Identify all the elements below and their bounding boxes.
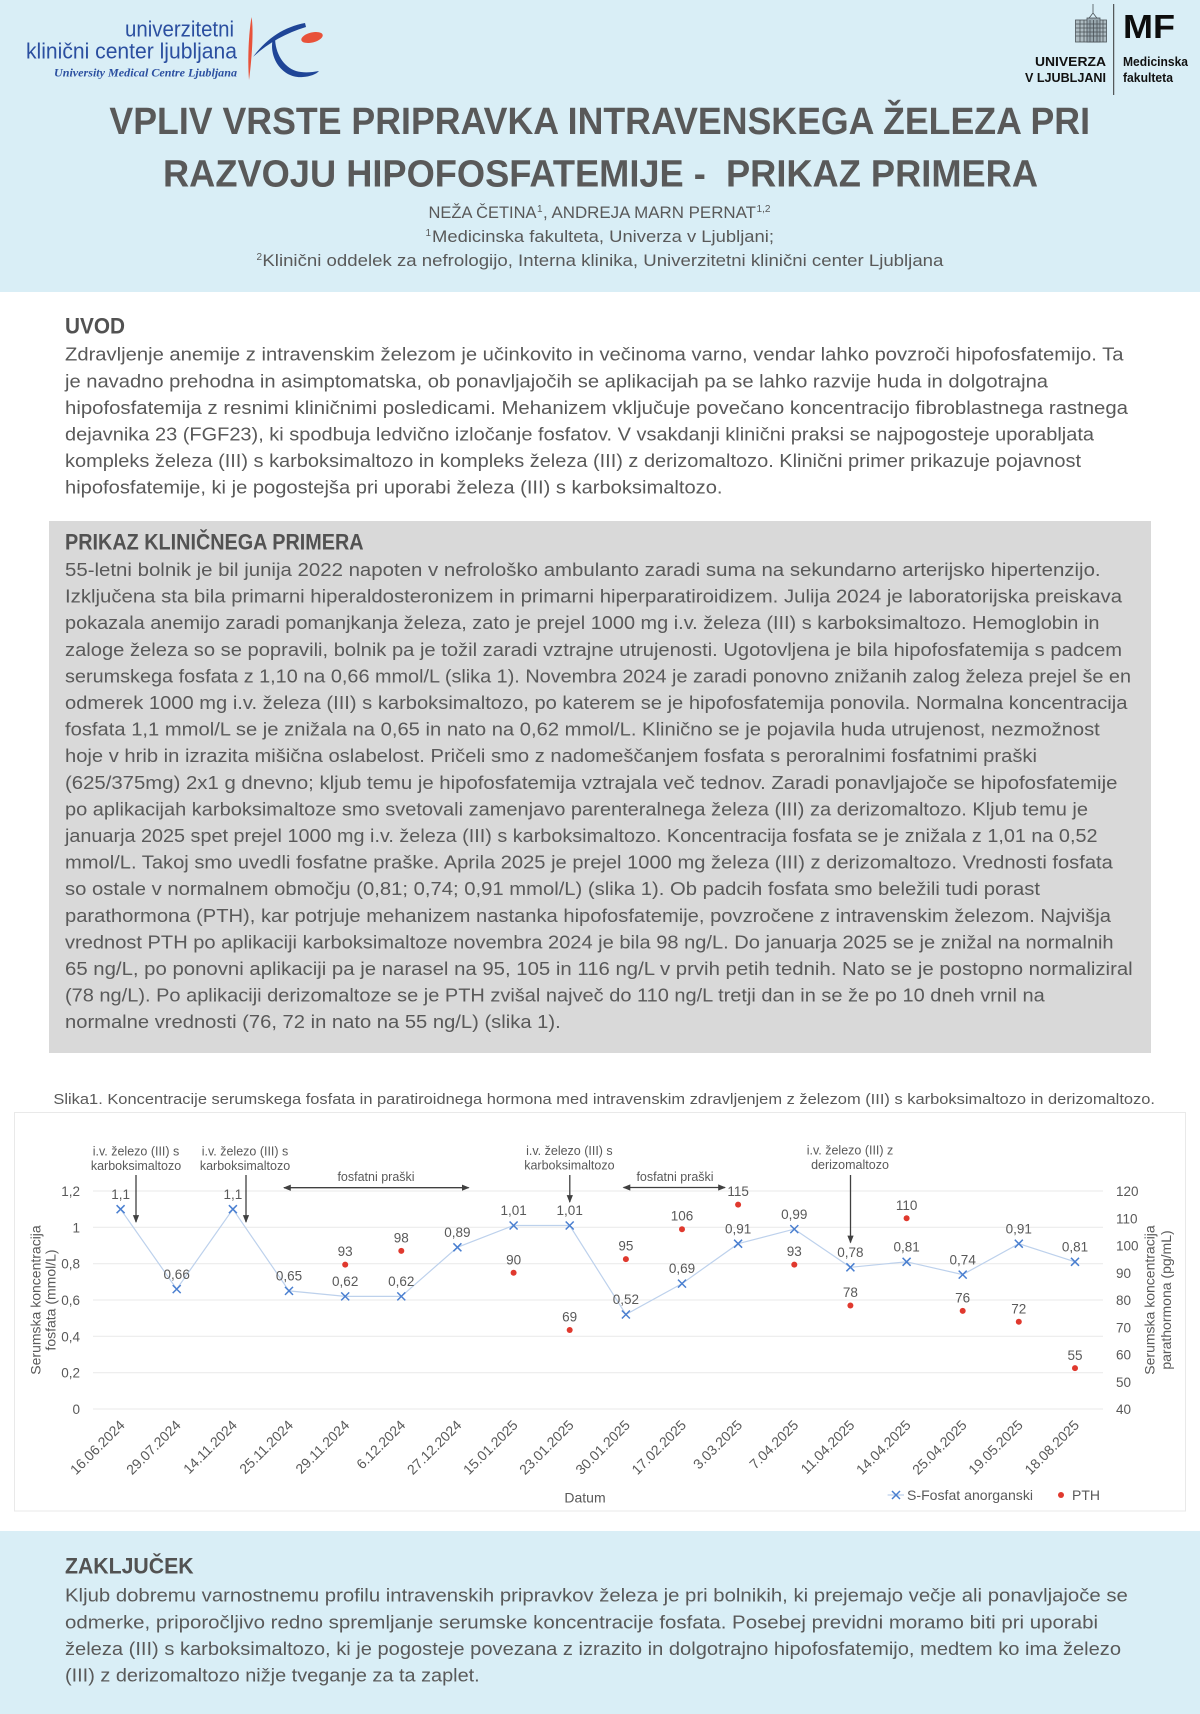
phosphate value labels: 0,52 (613, 1292, 639, 1307)
text block: uvod (64, 344, 1129, 498)
icon: university building (1076, 4, 1106, 42)
x axis date labels: 23.01.2025 (516, 1417, 577, 1478)
title (109, 99, 1090, 196)
x axis date labels: 7.04.2025 (746, 1417, 802, 1472)
right axis title: Serumska koncentracija (1142, 1225, 1158, 1375)
x axis date labels: 11.04.2025 (797, 1417, 858, 1477)
PTH value labels: 69 (562, 1310, 577, 1324)
text block: prikaz primera: zaloge železa so se popravili, bolnik pa je tožil zaradi vztrajne utrujenosti. Ugotovljena je bila hipofosfatemija s padcem (65, 639, 1122, 660)
annotation: iron derisomaltose (807, 1144, 893, 1242)
PTH value labels: 106 (671, 1208, 693, 1224)
phosphate value labels: 0,89 (444, 1225, 471, 1240)
left axis title: Serumska koncentracija (28, 1225, 44, 1375)
text block: zaključek: odmerke, priporočljivo redno spremljanje serumske koncentracije fosfata. Posebej previdni moramo biti pri uporabi (65, 1611, 1098, 1632)
PTH value labels: 110 (896, 1198, 917, 1213)
text block: prikaz primera: so ostale v normalnem območju (0,81; 0,74; 0,91 mmol/L) (slika 1). Ob padcih fosfata smo beležili tudi porast (65, 878, 1040, 899)
phosphate value labels: 0,81 (893, 1240, 920, 1254)
phosphate value labels: 1,1 (111, 1187, 130, 1202)
x axis date labels: 19.05.2025 (965, 1417, 1026, 1478)
text block: uvod: dejavnika 23 (FGF23), ki spodbuja ledvično izločanje fosfatov. V vsakdanji klinični praksi se najpogosteje uporabljata (65, 424, 1095, 444)
text block: prikaz primera: (78 ng/L). Po aplikaciji derizomaltoze se je PTH zvišal največ do 110 ng/L tretji dan in se že po 10 dneh vrnil na (65, 985, 1045, 1006)
text block: prikaz primera: serumskega fosfata z 1,10 na 0,66 mmol/L (slika 1). Novembra 2024 je zaradi ponovno znižanih zalog železa prejel še en (65, 665, 1131, 686)
x axis title: Datum (564, 1490, 606, 1506)
authors and affiliations: , ANDREJA MARN PERNAT (543, 204, 756, 222)
x axis date labels: 29.07.2024 (123, 1417, 184, 1478)
right axis labels: 80 (1116, 1293, 1131, 1308)
panel: prikaz kliničnega primera (49, 521, 1151, 1053)
authors and affiliations: Klinični oddelek za nefrologijo, Interna klinika, Univerzitetni klinični center Ljubljana (262, 252, 944, 270)
phosphate value labels: 0,78 (837, 1245, 864, 1260)
phosphate line (121, 1209, 1075, 1314)
chart: phosphate and PTH over time (14, 1112, 1186, 1511)
panel: uvod (64, 313, 1129, 498)
PTH value labels: 55 (1067, 1348, 1083, 1363)
logo: UKC Ljubljana: University Medical Centre Ljubljana (54, 66, 237, 80)
logo: Univerza v Ljubljani, Medicinska fakulteta (1025, 4, 1189, 95)
text block: uvod: hipofosfatemije, ki je pogostejša pri uporabi železa (III) s karboksimaltozo. (65, 477, 722, 498)
x axis date labels (67, 1417, 1082, 1478)
legend: PTH (1072, 1487, 1100, 1503)
left axis labels: 0 (72, 1402, 80, 1417)
phosphate value labels: 0,99 (781, 1207, 807, 1222)
left axis title (28, 1225, 58, 1375)
PTH value labels: 115 (727, 1184, 749, 1199)
logo: UKC Ljubljana: klinični center ljubljana (26, 38, 238, 63)
phosphate value labels: 1,01 (500, 1203, 527, 1218)
phosphate value labels: 0,66 (164, 1267, 190, 1282)
text block: prikaz primera: mmol/L. Takoj smo uvedli fosfatne praške. Aprila 2025 je prejel 1000 mg železa (III) z derizomaltozo. Vrednosti fosfata (65, 852, 1114, 873)
heading: zaključek: ZAKLJUČEK (65, 1553, 194, 1578)
left axis labels: 0,4 (61, 1329, 80, 1344)
text block: prikaz primera: fosfata 1,1 mmol/L se je znižala na 0,65 in nato na 0,62 mmol/L. Klinično se je pojavila huda utrujenost, nezmožnost (65, 719, 1100, 740)
phosphate value labels: 1,01 (557, 1203, 583, 1218)
text block: uvod: kompleks železa (III) s karboksimaltozo in kompleks železa (III) z derizomaltozo. Klinični primer prikazuje pojavnost (65, 450, 1081, 471)
x axis date labels: 15.01.2025 (460, 1417, 521, 1478)
text block: prikaz primera: hoje v hrib in izrazita mišična oslabelost. Pričeli smo z nadomeščanjem fosfata s peroralnimi fosfatnimi praški (65, 745, 1037, 766)
text block: zaključek: železa (III) s karboksimaltozo, ki je pogosteje povezana z izrazito in dolgotrajno hipofosfatemijo, medtem ko ima železo (65, 1638, 1121, 1659)
phosphate value labels: 0,91 (725, 1222, 751, 1236)
logo: Univerza v Ljubljani, Medicinska fakulteta: V LJUBLJANI (1025, 70, 1106, 85)
phosphate value labels: 0,81 (1062, 1240, 1088, 1254)
PTH value labels: 93 (787, 1244, 802, 1259)
annotation: phosphate powders 2: fosfatni praški (636, 1170, 714, 1184)
text block: prikaz primera: 65 ng/L, po ponovni aplikaciji pa je narasel na 95, 105 in 116 ng/L v prvih petih tednih. Nato se je postopno normaliziral (65, 958, 1133, 979)
left axis labels: 0,2 (61, 1366, 80, 1381)
right axis title: parathormona (pg/mL) (1158, 1230, 1174, 1370)
annotation: iron derisomaltose: i.v. železo (III) z (807, 1144, 893, 1158)
annotation: iron carboxymaltose 3: karboksimaltozo (524, 1158, 615, 1172)
text block: prikaz primera: vrednost PTH po aplikaciji karboksimaltoze novembra 2024 je bila 98 ng/L. Do januarja 2025 se je znižal na normalnih (65, 931, 1114, 952)
title: VPLIV VRSTE PRIPRAVKA INTRAVENSKEGA ŽELEZA PRI (109, 99, 1090, 143)
text block: zaključek: (III) z derizomaltozo nižje tveganje za ta zaplet. (65, 1665, 480, 1686)
phosphate value labels (111, 1187, 1088, 1307)
heading: prikaz kliničnega primera: PRIKAZ KLINIČNEGA PRIMERA (65, 529, 364, 554)
authors and affiliations: 1 (426, 228, 432, 239)
annotation: iron carboxymaltose 2: karboksimaltozo (200, 1159, 290, 1173)
x axis date labels: 30.01.2025 (572, 1417, 633, 1478)
phosphate value labels: 0,74 (950, 1252, 976, 1268)
phosphate markers (117, 1205, 1079, 1318)
text block: uvod: je navadno prehodna in asimptomatska, ob ponavljajočih se aplikacijah pa se lahko razvije huda in dolgotrajna (64, 370, 1049, 391)
text block: prikaz primera: normalne vrednosti (76, 72 in nato na 55 ng/L) (slika 1). (65, 1011, 561, 1032)
text block: prikaz primera: pokazala anemijo zaradi pomanjkanja železa, zato je prejel 1000 mg i.v. železa (III) s karboksimaltozo. Hemoglobin in (65, 612, 1099, 633)
authors and affiliations: 1 (537, 204, 543, 215)
x axis date labels: 25.11.2024 (236, 1417, 296, 1477)
text block: prikaz primera: januarja 2025 spet prejel 1000 mg i.v. železa (III) s karboksimaltozo. Koncentracija fosfata se je znižala z 1,01 na 0,52 (64, 825, 1098, 846)
right axis labels: 110 (1116, 1211, 1138, 1226)
left axis labels (61, 1184, 80, 1417)
heading: uvod: UVOD (65, 313, 125, 338)
logo: Univerza v Ljubljani, Medicinska fakulteta: MF (1123, 8, 1175, 45)
PTH dots (342, 1202, 1078, 1371)
annotation: phosphate powders 2 (624, 1170, 725, 1188)
text block: prikaz primera: parathormona (PTH), kar potrjuje mehanizem nastanka hipofosfatemije, povzročene z intravenskim železom. Najvišja (65, 905, 1112, 926)
annotation: iron carboxymaltose 1: karboksimaltozo (91, 1159, 181, 1173)
authors and affiliations: NEŽA ČETINA (428, 203, 536, 222)
PTH value labels: 76 (955, 1290, 970, 1306)
PTH value labels (338, 1184, 1083, 1363)
text block: uvod: Zdravljenje anemije z intravenskim železom je učinkovito in večinoma varno, vendar lahko povzroči hipofosfatemijo. Ta (65, 344, 1124, 365)
PTH value labels: 78 (843, 1285, 858, 1300)
right axis labels: 100 (1116, 1238, 1139, 1254)
x axis date labels: 14.04.2025 (853, 1417, 914, 1478)
annotation: iron carboxymaltose 2 (200, 1144, 290, 1222)
text block: prikaz primera: po aplikacijah karboksimaltoze smo svetovali zamenjavo parenteralnega železa (III) za derizomaltozo. Kljub temu je (65, 798, 1088, 819)
panel: zaključek (0, 1531, 1200, 1714)
right axis labels: 60 (1116, 1348, 1131, 1362)
title: RAZVOJU HIPOFOSFATEMIJE - PRIKAZ PRIMERA (163, 154, 1038, 196)
text block: prikaz primera: 55-letni bolnik je bil junija 2022 napoten v nefrološko ambulanto zaradi suma na sekundarno arterijsko hipertenzijo. (65, 559, 1101, 580)
phosphate value labels: 0,69 (669, 1261, 695, 1276)
logo: Univerza v Ljubljani, Medicinska fakulteta: UNIVERZA (1035, 54, 1107, 69)
x axis date labels: 29.11.2024 (292, 1417, 352, 1477)
phosphate value labels: 1,1 (224, 1187, 242, 1202)
left axis labels: 1,2 (61, 1184, 80, 1199)
text block: zaključek (65, 1585, 1128, 1686)
legend: S-Fosfat anorganski (907, 1487, 1033, 1503)
logo: Univerza v Ljubljani, Medicinska fakulteta: Medicinska (1123, 54, 1189, 69)
x axis date labels: 3.03.2025 (690, 1417, 745, 1472)
text block: prikaz primera: Izključena sta bila primarni hiperaldosteronizem in primarni hiperparatiroidizem. Julija 2024 je laboratorijska preiskava (65, 586, 1123, 607)
figure caption: Slika1. Koncentracije serumskega fosfata in paratiroidnega hormona med intravenskim zdravljenjem z železom (III) s karboksimaltozo in derizomaltozo. (53, 1091, 1155, 1108)
phosphate value labels: 0,65 (276, 1268, 302, 1284)
text block: uvod: hipofosfatemija z resnimi kliničnimi posledicami. Mehanizem vključuje povečano koncentracijo fibroblastnega rastnega (65, 397, 1129, 418)
logo: UKC Ljubljana: univerzitetni (125, 17, 234, 42)
annotation: iron carboxymaltose 2: i.v. železo (III) s (202, 1144, 288, 1158)
x axis date labels: 16.06.2024 (67, 1417, 128, 1478)
logo: UKC Ljubljana (26, 17, 324, 80)
x axis date labels: 18.08.2025 (1021, 1417, 1082, 1478)
authors and affiliations: 2 (256, 252, 262, 263)
x axis date labels: 14.11.2024 (180, 1417, 240, 1477)
phosphate value labels: 0,91 (1006, 1222, 1032, 1236)
authors and affiliations (256, 203, 944, 270)
authors and affiliations: Medicinska fakulteta, Univerza v Ljubljani; (432, 228, 774, 246)
right axis labels: 90 (1116, 1266, 1131, 1281)
logo: Univerza v Ljubljani, Medicinska fakulteta: fakulteta (1123, 70, 1174, 85)
right axis labels: 50 (1116, 1375, 1131, 1390)
left axis labels: 1 (72, 1220, 80, 1235)
PTH value labels: 93 (338, 1244, 353, 1259)
x axis date labels: 17.02.2025 (628, 1417, 689, 1478)
annotation: iron carboxymaltose 3 (524, 1144, 615, 1202)
text block: zaključek: Kljub dobremu varnostnemu profilu intravenskih pripravkov železa je pri bolnikih, ki prejemajo večje ali ponavljajoče se (65, 1585, 1128, 1606)
right axis labels: 70 (1116, 1320, 1131, 1335)
authors and affiliations: 1,2 (756, 204, 771, 215)
annotation: phosphate powders 1: fosfatni praški (337, 1170, 415, 1184)
annotation: iron carboxymaltose 1: i.v. železo (III) s (93, 1144, 179, 1158)
phosphate value labels: 0,62 (332, 1274, 358, 1289)
PTH value labels: 90 (506, 1252, 521, 1268)
x axis date labels: 27.12.2024 (404, 1417, 465, 1478)
text block: prikaz primera (64, 559, 1133, 1032)
left axis labels: 0,6 (61, 1293, 80, 1308)
right axis labels: 40 (1116, 1402, 1131, 1417)
left axis labels: 0,8 (61, 1257, 80, 1272)
right axis title (1142, 1225, 1174, 1375)
right axis labels: 120 (1116, 1184, 1139, 1199)
PTH value labels: 95 (618, 1238, 633, 1254)
phosphate value labels: 0,62 (388, 1274, 414, 1289)
left axis title: fosfata (mmol/L) (42, 1249, 58, 1351)
x axis date labels: 25.04.2025 (909, 1417, 970, 1478)
panel: header (0, 0, 1200, 292)
PTH value labels: 98 (394, 1230, 409, 1246)
annotation: iron carboxymaltose 1 (91, 1144, 181, 1222)
annotation: iron carboxymaltose 3: i.v. železo (III) s (526, 1144, 613, 1158)
x axis date labels: 6.12.2024 (353, 1417, 409, 1472)
right axis labels (1116, 1184, 1139, 1417)
annotation: iron derisomaltose: derizomaltozo (811, 1158, 889, 1172)
legend (888, 1487, 1100, 1503)
text block: prikaz primera: odmerek 1000 mg i.v. železa (III) s karboksimaltozo, po katerem se je hipofosfatemija ponovila. Normalna koncentracija (65, 692, 1128, 713)
PTH value labels: 72 (1011, 1302, 1026, 1316)
text block: prikaz primera: (625/375mg) 2x1 g dnevno; kljub temu je hipofosfatemija vztrajala več tednov. Zaradi ponavljajoče se hipofosfatemije (65, 772, 1117, 793)
